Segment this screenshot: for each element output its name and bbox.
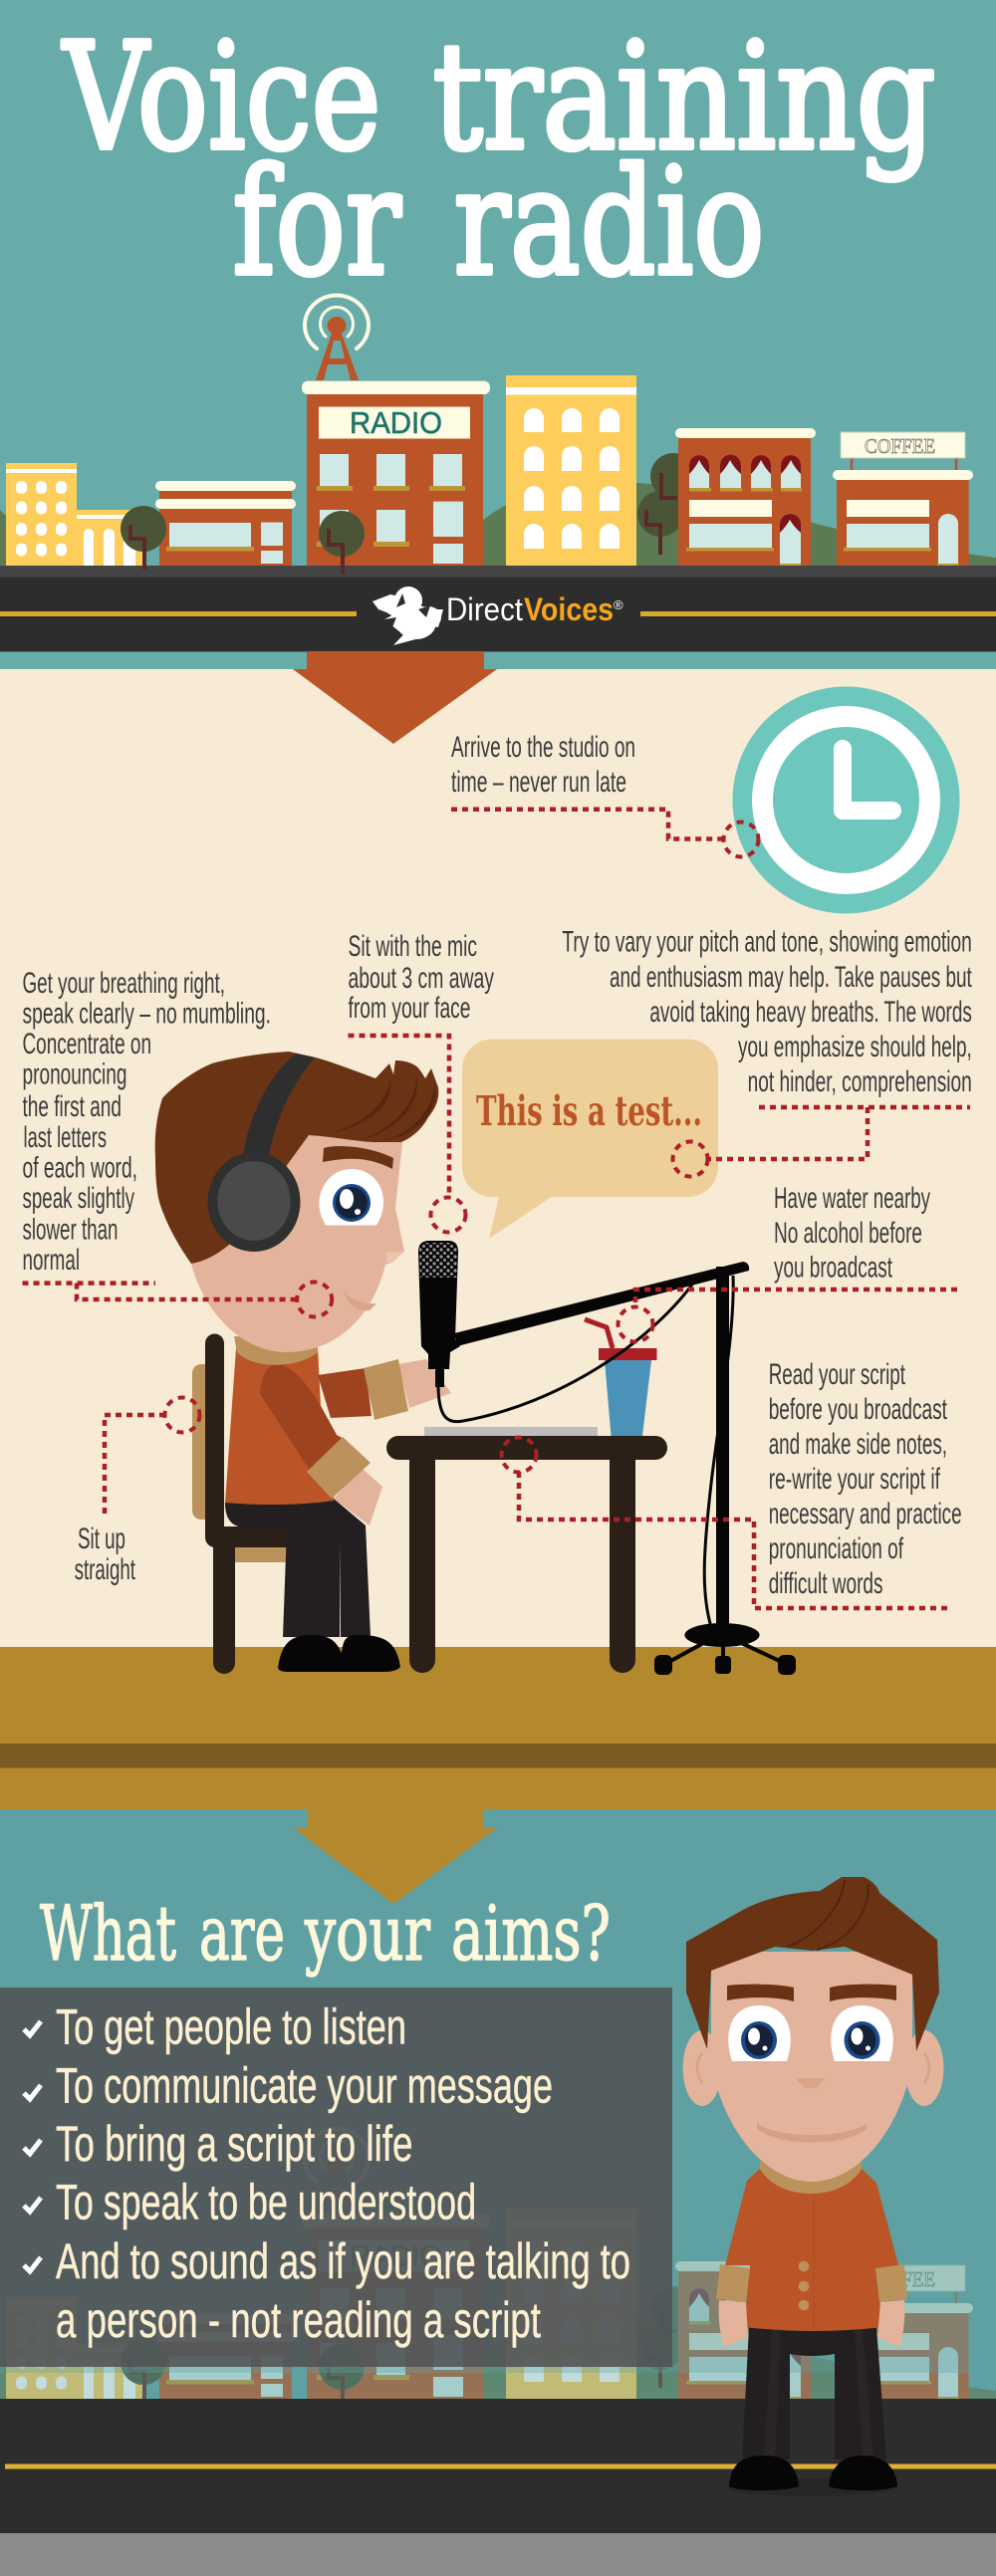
title: radio — [454, 137, 765, 309]
microphone — [418, 1241, 460, 1387]
text: breathing: speak slightly — [22, 1182, 134, 1215]
text: breathing: normal — [22, 1244, 80, 1277]
face — [711, 1952, 912, 2182]
callout line: posture — [105, 1398, 199, 1514]
title: Voice — [62, 12, 380, 183]
text: mic distance: Sit with the mic — [349, 930, 477, 963]
eyebrow — [323, 1146, 393, 1169]
coffee shop: COFFEE — [865, 434, 935, 458]
text: read script: difficult words — [769, 1567, 882, 1600]
logo: DirectVoices: ® — [614, 597, 623, 612]
text: breathing — [22, 967, 271, 1277]
text: read script — [769, 1358, 962, 1600]
trousers — [742, 2327, 886, 2459]
callout line: clock — [451, 810, 759, 856]
callout line: water — [618, 1289, 957, 1342]
text: mic distance — [349, 930, 494, 1025]
text: sit up straight: Sit up — [78, 1522, 125, 1555]
cuff — [364, 1359, 408, 1420]
standing man — [683, 1877, 944, 2496]
heading: aims: What — [40, 1889, 176, 1978]
upper arm — [260, 1364, 344, 1472]
text: breathing: Get your breathing right, — [22, 967, 225, 1000]
buttons — [799, 2261, 809, 2310]
speech bubble — [462, 1040, 718, 1239]
faded town: lower band — [0, 2373, 996, 2399]
text: read script: Read your script — [769, 1358, 905, 1391]
text: arrive on time — [451, 731, 635, 799]
small yellow buildings — [6, 463, 142, 566]
text: sit up straight — [75, 1522, 135, 1586]
logo: DirectVoices: Voices — [524, 591, 614, 627]
logo: DirectVoices — [373, 586, 623, 645]
aims text: To bring a script to life — [56, 2116, 412, 2172]
table — [386, 1436, 667, 1673]
collar — [760, 2161, 862, 2194]
coffee shop — [833, 432, 973, 566]
title: for — [233, 137, 401, 309]
nose — [386, 1252, 404, 1263]
headphones — [243, 1054, 315, 1155]
background: lower teal — [0, 1809, 996, 2399]
radio building: RADIO — [350, 405, 442, 440]
nose — [796, 2078, 826, 2088]
text: arrive on time: time – never run late — [451, 766, 626, 799]
text: breathing: slower than — [22, 1214, 118, 1247]
shirt — [225, 1348, 337, 1505]
hair strands — [329, 1075, 435, 1141]
speech bubble: This is a test... — [476, 1087, 702, 1135]
aims text: To speak to be understood — [56, 2175, 476, 2230]
cuffs — [716, 2264, 907, 2302]
shoes — [729, 2456, 897, 2490]
back trees — [637, 453, 696, 555]
aims text: To get people to listen — [56, 1999, 406, 2055]
checkmarks — [24, 2021, 41, 2271]
tree — [319, 511, 365, 575]
arrow: gold — [294, 1809, 497, 1904]
cheek — [343, 1289, 376, 1310]
callout line: mic — [349, 1036, 466, 1233]
faded town: upper — [0, 2127, 973, 2373]
town skyline — [0, 296, 996, 575]
eyebrows — [727, 1985, 896, 2001]
text: breathing: of each word, — [22, 1151, 137, 1185]
text: mic distance: from your face — [349, 992, 470, 1025]
forearm — [318, 1368, 372, 1418]
brick building — [675, 428, 816, 566]
callout line: script — [502, 1438, 952, 1608]
ears — [683, 2030, 721, 2106]
eye — [319, 1169, 383, 1225]
low shop — [155, 481, 296, 566]
seated man — [155, 1052, 451, 1672]
hand holding — [398, 1359, 451, 1408]
script paper — [424, 1427, 598, 1436]
floor — [0, 1647, 996, 1809]
heading: aims: your — [304, 1889, 430, 1978]
heading: aims — [40, 1889, 611, 1978]
lower cuff — [307, 1437, 371, 1499]
collar — [234, 1336, 318, 1365]
text: water — [774, 1182, 930, 1284]
text: arrive on time: Arrive to the studio on — [451, 731, 635, 764]
radio building — [302, 296, 490, 566]
hands — [719, 2300, 904, 2347]
chair — [192, 1334, 289, 1674]
shadow — [727, 2478, 896, 2496]
lower hand — [334, 1468, 382, 1525]
text: breathing: last letters — [24, 1121, 107, 1154]
callout line: breathing — [22, 1283, 332, 1316]
mic stand — [438, 1262, 796, 1675]
text: water: you broadcast — [774, 1251, 892, 1284]
text: breathing: speak clearly – no mumbling. — [22, 997, 271, 1030]
cup — [585, 1319, 657, 1436]
text: breathing: pronouncing — [22, 1057, 127, 1090]
arrow: rust — [293, 651, 497, 744]
face — [191, 1130, 404, 1352]
text: pitch and tone — [562, 926, 972, 1098]
road: top — [0, 566, 996, 651]
heading: aims: are — [199, 1889, 285, 1978]
aims text — [56, 1999, 630, 2348]
eyes — [728, 2005, 893, 2061]
shirt — [725, 2169, 899, 2331]
clock icon — [733, 687, 960, 914]
panel: aims list — [0, 1988, 672, 2367]
hair — [686, 1877, 939, 2051]
trousers — [225, 1499, 371, 1637]
callout line: bubble — [673, 1107, 970, 1177]
text: breathing: Concentrate on — [22, 1028, 151, 1060]
aims text: And to sound as if you are talking to — [56, 2233, 630, 2289]
aims text: To communicate your message — [56, 2058, 553, 2114]
hair — [155, 1052, 438, 1264]
background: sky — [0, 0, 996, 669]
heading: aims: aims? — [451, 1889, 611, 1978]
aims text: a person - not reading a script — [56, 2292, 541, 2348]
shoes — [278, 1635, 400, 1672]
text: read script: pronunciation of — [769, 1532, 903, 1565]
background: cream studio wall — [0, 669, 996, 1647]
base strip — [0, 2533, 996, 2576]
smile — [757, 2123, 867, 2143]
tree trunks over sidewalk — [144, 566, 343, 575]
title — [62, 12, 935, 309]
text: sit up straight: straight — [75, 1553, 135, 1586]
logo: DirectVoices: Direct — [446, 591, 523, 627]
lower road — [0, 2399, 996, 2533]
text: breathing: the first and — [22, 1090, 122, 1123]
tree — [121, 506, 166, 570]
tall yellow building — [506, 375, 636, 566]
text: mic distance: about 3 cm away — [349, 962, 494, 995]
